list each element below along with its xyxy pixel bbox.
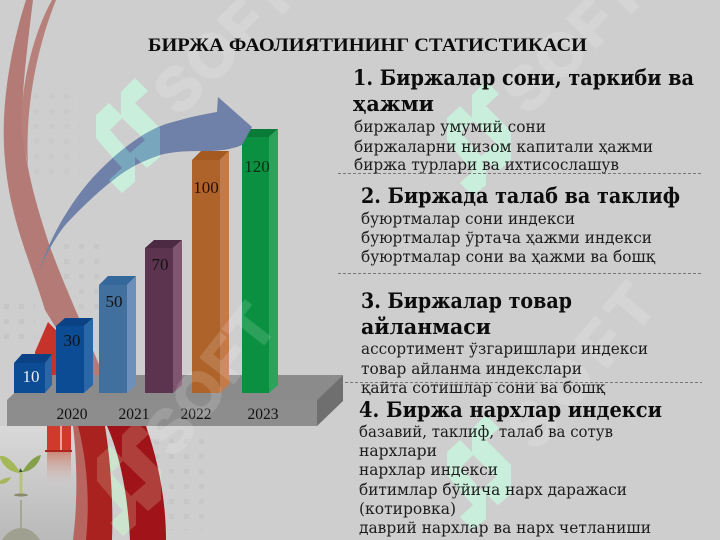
section 4: 4. Биржа нархлар индекси [359,397,662,422]
ribbon strip [73,426,89,540]
bar 2020 small [14,354,52,393]
bar 2022: 100 [193,178,219,197]
section 4: (котировка) [359,499,456,518]
section 3: айланмаси [361,314,491,339]
section 1 [353,65,694,174]
soft watermark text: SOFT [131,290,290,467]
halftone dots [0,85,205,530]
watermark logo 4 [447,415,511,530]
section 3: қайта сотишлар сони ва бошқ [361,378,605,397]
red arrow shape [35,322,75,385]
bar 2023: 120 [244,157,270,176]
year labels: 2022 [180,406,212,423]
section 1: биржа турлари ва ихтисослашув [354,155,619,174]
red reflection [47,452,71,484]
section 4: битимлар бўйича нарх даражаси [359,480,627,499]
bar 2023 [242,129,278,393]
section 4: даврий нархлар ва нарх четланиши [359,518,651,537]
title: БИРЖА ФАОЛИЯТИНИНГ СТАТИСТИКАСИ [148,36,588,56]
year labels [56,406,279,423]
watermark logo 2 [447,81,511,196]
red ribbon thin [21,0,56,165]
bar 2021: 50 [106,292,122,311]
year labels: 2020 [56,406,88,423]
red ribbon upper [4,0,100,385]
soft watermark text: SOFT [495,264,675,460]
plant [0,455,41,540]
section 3: ассортимент ўзгаришлари индекси [361,339,648,358]
bar 2022 small [145,240,182,393]
floor glow bottom left [0,426,90,540]
arrow and logo overlap [109,126,160,182]
bar 2020 small: 10 [22,367,40,386]
platform [7,375,343,426]
bar chart [14,129,278,393]
red ribbon lower right [107,426,166,540]
section 2 [361,183,680,266]
section 2: 2. Биржада талаб ва таклиф [361,183,680,208]
section 3: 3. Биржалар товар [361,288,572,313]
red base below platform [45,426,72,452]
watermark logo 3 [97,421,161,536]
section 2: буюртмалар сони ва ҳажми ва бошқ [361,247,655,266]
year labels: 2023 [248,406,279,423]
section 1: биржалар умумий сони [354,117,546,136]
section 1: ҳажми [353,91,434,116]
soft watermark text [131,0,675,467]
section 1: 1. Биржалар сони, таркиби ва [353,65,694,90]
logo tint on ribbons [97,426,161,536]
bar 2022 [192,151,229,393]
year labels: 2021 [118,406,150,423]
section 3 [361,288,648,397]
growth arrow [39,97,252,271]
bar 2020 [56,318,93,393]
watermark logo 1 [96,78,160,193]
dashed dividers [338,174,702,382]
section 1: биржаларни низом капитали ҳажми [354,137,653,156]
red ribbon lower left [78,426,112,540]
bar 2021 [99,276,136,393]
section 3: товар айланма индекслари [361,359,582,378]
section 4: нархлар индекси [359,460,498,479]
section 4: базавий, таклиф, талаб ва сотув [359,422,613,441]
section 2: буюртмалар ўртача ҳажми индекси [361,228,652,247]
section 4 [359,397,662,537]
section 2: буюртмалар сони индекси [361,209,575,228]
bar 2020: 30 [64,331,80,350]
section 4: нархлари [359,441,437,460]
bar 2022 small: 70 [152,255,168,274]
